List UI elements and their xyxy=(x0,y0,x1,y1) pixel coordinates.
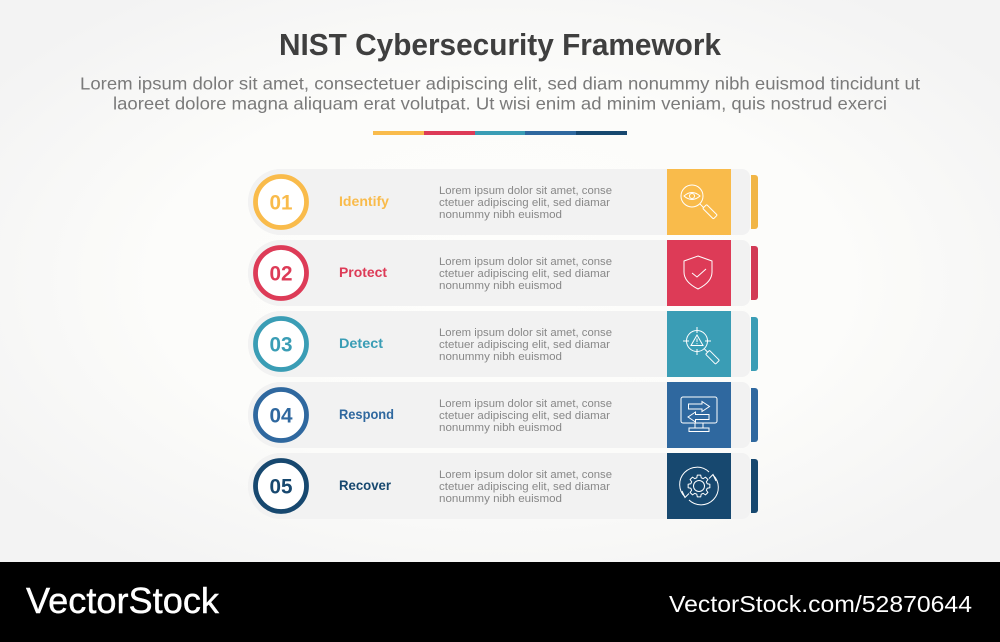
label: Protect xyxy=(339,264,387,280)
watermark footer bar xyxy=(0,562,1000,642)
description: Lorem ipsum dolor sit amet, conse xyxy=(439,185,612,197)
row 01: Identify xyxy=(248,169,758,235)
title: NIST Cybersecurity Framework xyxy=(279,27,722,62)
side tab xyxy=(751,317,758,371)
number badge: 04 xyxy=(270,404,293,428)
icon square: target with warning and magnifier xyxy=(667,311,731,377)
colour legend divider xyxy=(373,131,627,135)
description: Lorem ipsum dolor sit amet, conse xyxy=(439,256,612,268)
side tab xyxy=(751,388,758,442)
number badge: 03 xyxy=(270,334,292,356)
image url: VectorStock.com/52870644 xyxy=(669,591,972,617)
description: Lorem ipsum dolor sit amet, conse xyxy=(439,469,612,481)
description: Lorem ipsum dolor sit amet, conse xyxy=(439,327,612,339)
icon square: magnifier with eye xyxy=(667,169,731,235)
description: nonummy nibh euismod xyxy=(439,493,562,505)
label: Respond xyxy=(339,406,394,422)
number badge xyxy=(248,453,314,519)
description: nonummy nibh euismod xyxy=(439,422,562,434)
number badge: 01 xyxy=(270,192,293,214)
row 05: Recover xyxy=(248,453,758,519)
description xyxy=(439,469,612,505)
side tab xyxy=(751,459,758,513)
row band xyxy=(248,382,750,448)
row 02: Protect xyxy=(248,240,758,306)
subtitle text: Lorem ipsum dolor sit amet, consectetuer adipiscing elit, sed diam nonummy nibh euismod tincidunt ut xyxy=(80,74,920,94)
number badge: 05 xyxy=(270,476,293,498)
description: Lorem ipsum dolor sit amet, conse xyxy=(439,398,612,410)
description: nonummy nibh euismod xyxy=(439,280,562,292)
description xyxy=(439,327,612,363)
description: ctetuer adipiscing elit, sed diamar xyxy=(439,339,610,351)
row 03: Detect xyxy=(248,311,758,377)
icon square: monitor with arrows xyxy=(667,382,731,448)
description: ctetuer adipiscing elit, sed diamar xyxy=(439,410,610,422)
description: ctetuer adipiscing elit, sed diamar xyxy=(439,268,610,280)
label: Detect xyxy=(339,335,383,351)
number badge xyxy=(248,240,314,306)
row 04: Respond xyxy=(248,382,758,448)
row band xyxy=(248,453,750,519)
icon square: gear with cycle arrows xyxy=(667,453,731,519)
row band xyxy=(248,311,750,377)
description xyxy=(439,185,612,221)
description xyxy=(439,398,612,434)
label: Recover xyxy=(339,477,392,493)
label: Identify xyxy=(339,193,389,209)
number badge: 02 xyxy=(270,262,292,286)
side tab xyxy=(751,175,758,229)
side tab xyxy=(751,246,758,300)
subtitle text: laoreet dolore magna aliquam erat volutpat. Ut wisi enim ad minim veniam, quis nostrud exerci xyxy=(113,94,887,114)
number badge xyxy=(248,311,314,377)
description: ctetuer adipiscing elit, sed diamar xyxy=(439,481,610,493)
description: nonummy nibh euismod xyxy=(439,351,562,363)
row band xyxy=(248,169,750,235)
number badge xyxy=(248,382,314,448)
brand wordmark: VectorStock xyxy=(26,580,220,621)
description: ctetuer adipiscing elit, sed diamar xyxy=(439,197,610,209)
subtitle text xyxy=(80,74,920,114)
number badge xyxy=(248,169,314,235)
row band xyxy=(248,240,750,306)
description: nonummy nibh euismod xyxy=(439,209,562,221)
icon square: shield xyxy=(667,240,731,306)
description xyxy=(439,256,612,292)
